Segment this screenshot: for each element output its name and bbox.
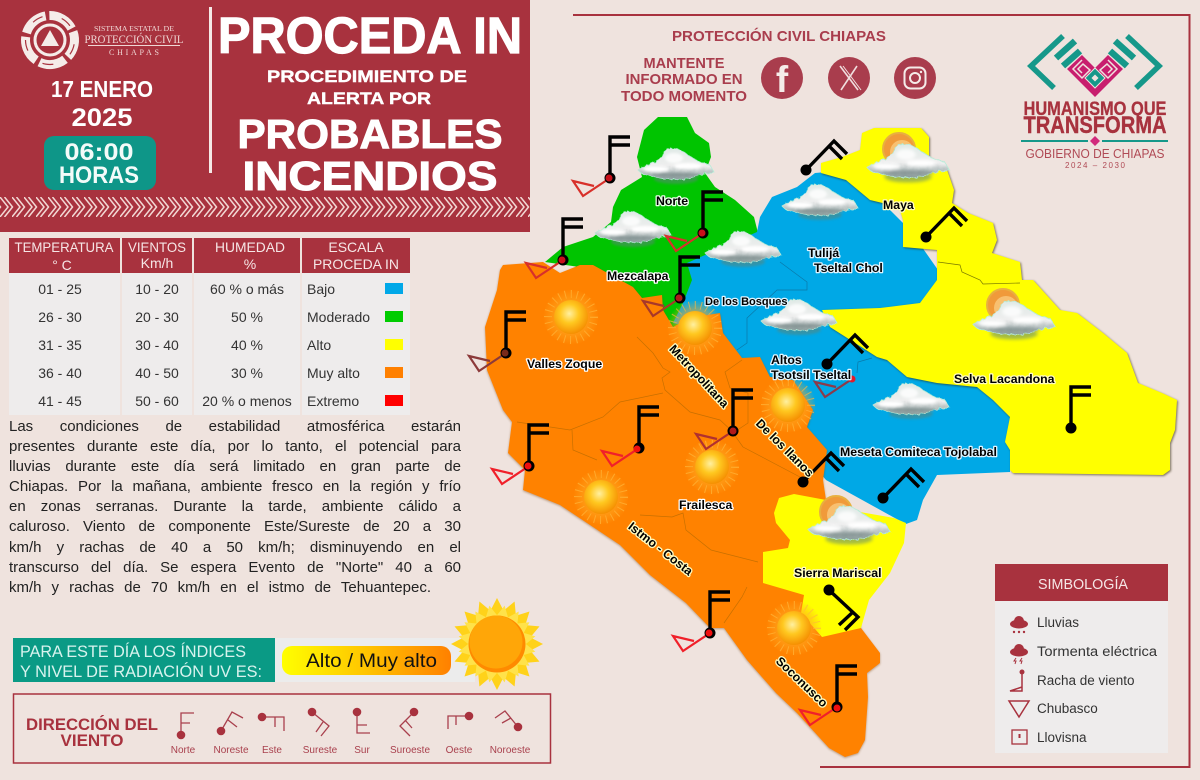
divider <box>209 7 212 173</box>
legend: dirección del viento: Este <box>262 745 282 756</box>
wind barb: Valles Zoque <box>469 312 526 371</box>
institution name: CHIAPAS <box>109 48 159 57</box>
wind barb: Sierra Mariscal <box>824 584 858 630</box>
logo: Humanismo que transforma: HUMANISMO QUE <box>1024 99 1166 120</box>
table: escala: TEMPERATURA <box>14 239 114 255</box>
title: PROCEDA IN <box>218 7 522 64</box>
wind barb: Maya north <box>800 141 847 176</box>
weather text block: presentes durante este día, por lo tanto, el potencial para <box>9 438 461 455</box>
table: escala: 50 % <box>231 309 263 325</box>
table: escala: 31 - 35 <box>38 337 82 353</box>
time badge: 06:00 <box>64 139 134 166</box>
gust: Altos <box>815 376 856 397</box>
icon: sun, Soconusco <box>766 600 822 656</box>
institution name: SISTEMA ESTATAL DE <box>94 24 174 33</box>
table: escala: 40 - 50 <box>135 365 179 381</box>
icon: sun, Istmo-Costa <box>573 469 629 525</box>
map labels: Norte <box>656 194 688 208</box>
social heading: PROTECCIÓN CIVIL CHIAPAS <box>672 27 886 45</box>
table: escala: Km/h <box>141 255 173 271</box>
time badge: HORAS <box>59 162 139 189</box>
social call to action: MANTENTE <box>644 55 724 72</box>
weather text block: km/h y rachas de 40 a 50 km/h; disminuyendo en el <box>9 539 461 556</box>
table: escala: 10 - 20 <box>135 281 179 297</box>
icon: sun, De los Llanos <box>760 377 816 433</box>
icon: racha <box>1010 670 1024 691</box>
legend: dirección del viento: DIRECCIÓN DEL <box>26 715 158 734</box>
map labels <box>527 194 1055 711</box>
icon: sun, Valles Zoque <box>543 289 599 345</box>
wind barb: Selva Lacandona <box>1066 387 1091 434</box>
magenta heart <box>1067 55 1123 97</box>
wind barb: Costa <box>673 592 730 651</box>
header panel <box>0 0 530 232</box>
wind barb: Soconusco <box>800 666 857 725</box>
map of Chiapas <box>485 117 1177 757</box>
wind barb: De los Llanos <box>798 453 844 488</box>
table: escala: 26 - 30 <box>38 309 82 325</box>
icon: cloud, Tulijá <box>782 184 859 220</box>
legend: dirección del viento: VIENTO <box>60 732 124 750</box>
UV radiation bar: Alto / Muy alto <box>306 651 437 672</box>
title: PROBABLES <box>238 111 502 157</box>
date: 2025 <box>72 104 133 132</box>
map labels: Istmo - Costa <box>625 519 696 578</box>
legend: dirección del viento <box>14 694 550 763</box>
icon: cloud, Maya <box>867 144 950 183</box>
table: escala: ° C <box>52 257 72 273</box>
icon: tormenta <box>1010 644 1028 664</box>
title <box>218 7 522 199</box>
table: escala: 60 % o más <box>210 281 284 297</box>
date: 17 ENERO <box>51 76 153 102</box>
legend: dirección del viento: Norte <box>171 745 196 756</box>
map labels: Tseltal Chol <box>814 261 883 275</box>
legend: dirección del viento: Noreste <box>213 745 249 756</box>
region: Sierra Mariscal (alto) <box>763 494 906 637</box>
icon: partly cloudy, Selva <box>987 289 1019 321</box>
map labels: Sierra Mariscal <box>794 566 882 580</box>
logo: Humanismo que transforma: GOBIERNO DE CHIAPAS <box>1026 146 1165 161</box>
right frame <box>573 15 1190 767</box>
table: escala: 41 - 45 <box>38 393 82 409</box>
table: escala: 30 % <box>231 365 263 381</box>
icon: llovisna <box>1012 730 1027 744</box>
table: escala: 50 - 60 <box>135 393 179 409</box>
icon: lluvias <box>1010 616 1028 633</box>
icon: facebook <box>761 57 803 100</box>
wind barb: De los Bosques <box>643 257 700 316</box>
wind barb: Istmo west <box>492 425 549 484</box>
map labels: De los Bosques <box>705 296 788 308</box>
social call to action: INFORMADO EN <box>626 71 742 88</box>
weather text block: km/h y rachas de 70 km/h en el istmo de Tehuantepec. <box>9 579 431 596</box>
institution name <box>84 24 184 57</box>
table: escala <box>9 238 410 415</box>
map labels: Altos <box>771 353 802 367</box>
table: escala: 20 - 30 <box>135 309 179 325</box>
wind barb: Frailesca west <box>602 407 659 466</box>
weather text block <box>9 418 461 596</box>
table: escala: PROCEDA IN <box>313 256 399 272</box>
table: escala: Bajo <box>307 281 335 297</box>
icon: cloud, De los Bosques <box>705 231 782 267</box>
icon: cloud, Mezcalapa <box>595 211 672 247</box>
weather text block: en zonas serranas. Durante la tarde, ambiente cálido a <box>9 498 461 515</box>
wind barb: Meseta <box>878 469 924 504</box>
title: PROCEDIMIENTO DE <box>267 67 467 86</box>
table: escala: Moderado <box>307 309 370 325</box>
UV radiation bar <box>13 598 543 690</box>
map labels: Valles Zoque <box>527 357 602 371</box>
icon: chubasco <box>1009 701 1029 717</box>
title: ALERTA POR <box>307 89 431 108</box>
table: escala: 40 % <box>231 337 263 353</box>
icon: partly cloudy, Sierra <box>820 496 852 528</box>
legend: dirección del viento: Oeste <box>446 745 473 756</box>
legend: simbología: Lluvias <box>1037 615 1079 630</box>
region: orange (muy alto) <box>485 262 880 757</box>
institution name: PROTECCIÓN CIVIL <box>84 32 184 46</box>
legend: simbología: Llovisna <box>1037 730 1087 745</box>
map labels: Selva Lacandona <box>954 372 1055 386</box>
wind barb: Metropolitana <box>696 390 753 449</box>
map labels: De los llanos <box>753 416 817 480</box>
icon: cloud, Norte <box>638 148 715 184</box>
icon: cloud, Selva <box>973 301 1056 340</box>
map labels: Frailesca <box>679 498 732 512</box>
region: Norte / Mezcalapa (moderado) <box>545 117 758 330</box>
region boundaries <box>517 337 800 623</box>
region: Maya / Selva Lacandona (alto) <box>821 128 1177 475</box>
legend: simbología: Chubasco <box>1037 701 1098 716</box>
table: escala: Alto <box>307 337 331 353</box>
logo: Humanismo que transforma: TRANSFORMA <box>1024 112 1166 139</box>
icon: cloud, Altos <box>761 299 838 335</box>
time badge <box>44 136 156 190</box>
legend: dirección del viento: Suroeste <box>390 745 430 756</box>
weather text block: lluvias durante este día será limitado en gran parte de <box>9 458 461 475</box>
legend: simbología: SIMBOLOGÍA <box>1038 576 1128 593</box>
icon: facebook: f <box>776 59 789 100</box>
logo: Humanismo que transforma: 2024 – 2030 <box>1065 161 1126 170</box>
map labels: Tulijá <box>808 246 839 260</box>
legend: dirección del viento: Sureste <box>303 745 338 756</box>
legend: dirección del viento: Noroeste <box>490 745 531 756</box>
map labels: Mezcalapa <box>607 269 669 283</box>
region: Tulijá, De los Bosques, Altos, Meseta (bajo) <box>673 170 1010 524</box>
UV radiation bar: Y NIVEL DE RADIACIÓN UV ES: <box>20 662 262 681</box>
teal frame marks <box>1031 36 1159 88</box>
wind barb: Norte <box>573 137 630 196</box>
table: escala: Extremo <box>307 393 359 409</box>
table: escala: 30 - 40 <box>135 337 179 353</box>
weather text block: caluroso. Viento de componente Este/Sureste de 20 a 30 <box>9 518 461 535</box>
icon: partly cloudy, Maya <box>883 133 915 165</box>
table: escala: 36 - 40 <box>38 365 82 381</box>
map labels: Soconusco <box>773 654 831 711</box>
title: INCENDIOS <box>242 153 498 199</box>
weather text block: Las condiciones de estabilidad atmosférica estarán <box>9 418 461 435</box>
icon: cloud, Meseta <box>873 383 950 419</box>
icon: sun, Frailesca <box>684 439 740 495</box>
social call to action <box>621 55 747 105</box>
chevron band <box>0 197 530 217</box>
wind barb: Mezcalapa <box>526 219 583 278</box>
logo: Humanismo que transforma <box>1021 36 1168 170</box>
icon: cloud, Sierra <box>808 506 891 545</box>
icon: UV sun <box>451 598 543 690</box>
icon: sun, Metropolitana <box>667 300 723 356</box>
table: escala: Muy alto <box>307 365 360 381</box>
table: escala: % <box>244 256 256 272</box>
icon: instagram <box>894 57 936 99</box>
map labels: Maya <box>883 198 914 212</box>
social call to action: TODO MOMENTO <box>621 88 747 105</box>
legend: simbología: Tormenta eléctrica <box>1037 644 1158 659</box>
wind barb: Altos <box>822 335 868 370</box>
legend: simbología: Racha de viento <box>1037 673 1135 688</box>
table: escala: 01 - 25 <box>38 281 82 297</box>
weather text block: transcurso del día. Se espera Evento de "Norte" 40 a 60 <box>9 559 461 576</box>
legend: dirección del viento: Sur <box>354 745 370 756</box>
icon: X <box>828 57 870 99</box>
legend: simbología <box>995 564 1168 753</box>
map labels: Metropolitana <box>666 342 732 411</box>
UV radiation bar: PARA ESTE DÍA LOS ÍNDICES <box>20 642 246 661</box>
table: escala: 20 % o menos <box>202 393 292 409</box>
date <box>51 76 153 132</box>
map labels: Tsotsil Tseltal <box>771 368 851 382</box>
logo: Protección Civil <box>19 9 81 71</box>
table: escala: ESCALA <box>328 239 384 255</box>
wind barb: Norte 2 <box>666 192 723 251</box>
wind barb: Maya east <box>920 208 967 242</box>
table: escala: HUMEDAD <box>215 239 285 255</box>
table: escala: VIENTOS <box>128 239 186 255</box>
map labels: Meseta Comiteca Tojolabal <box>840 445 997 459</box>
weather text block: Chiapas. Por la mañana, ambiente fresco en la región y frío <box>9 478 461 495</box>
